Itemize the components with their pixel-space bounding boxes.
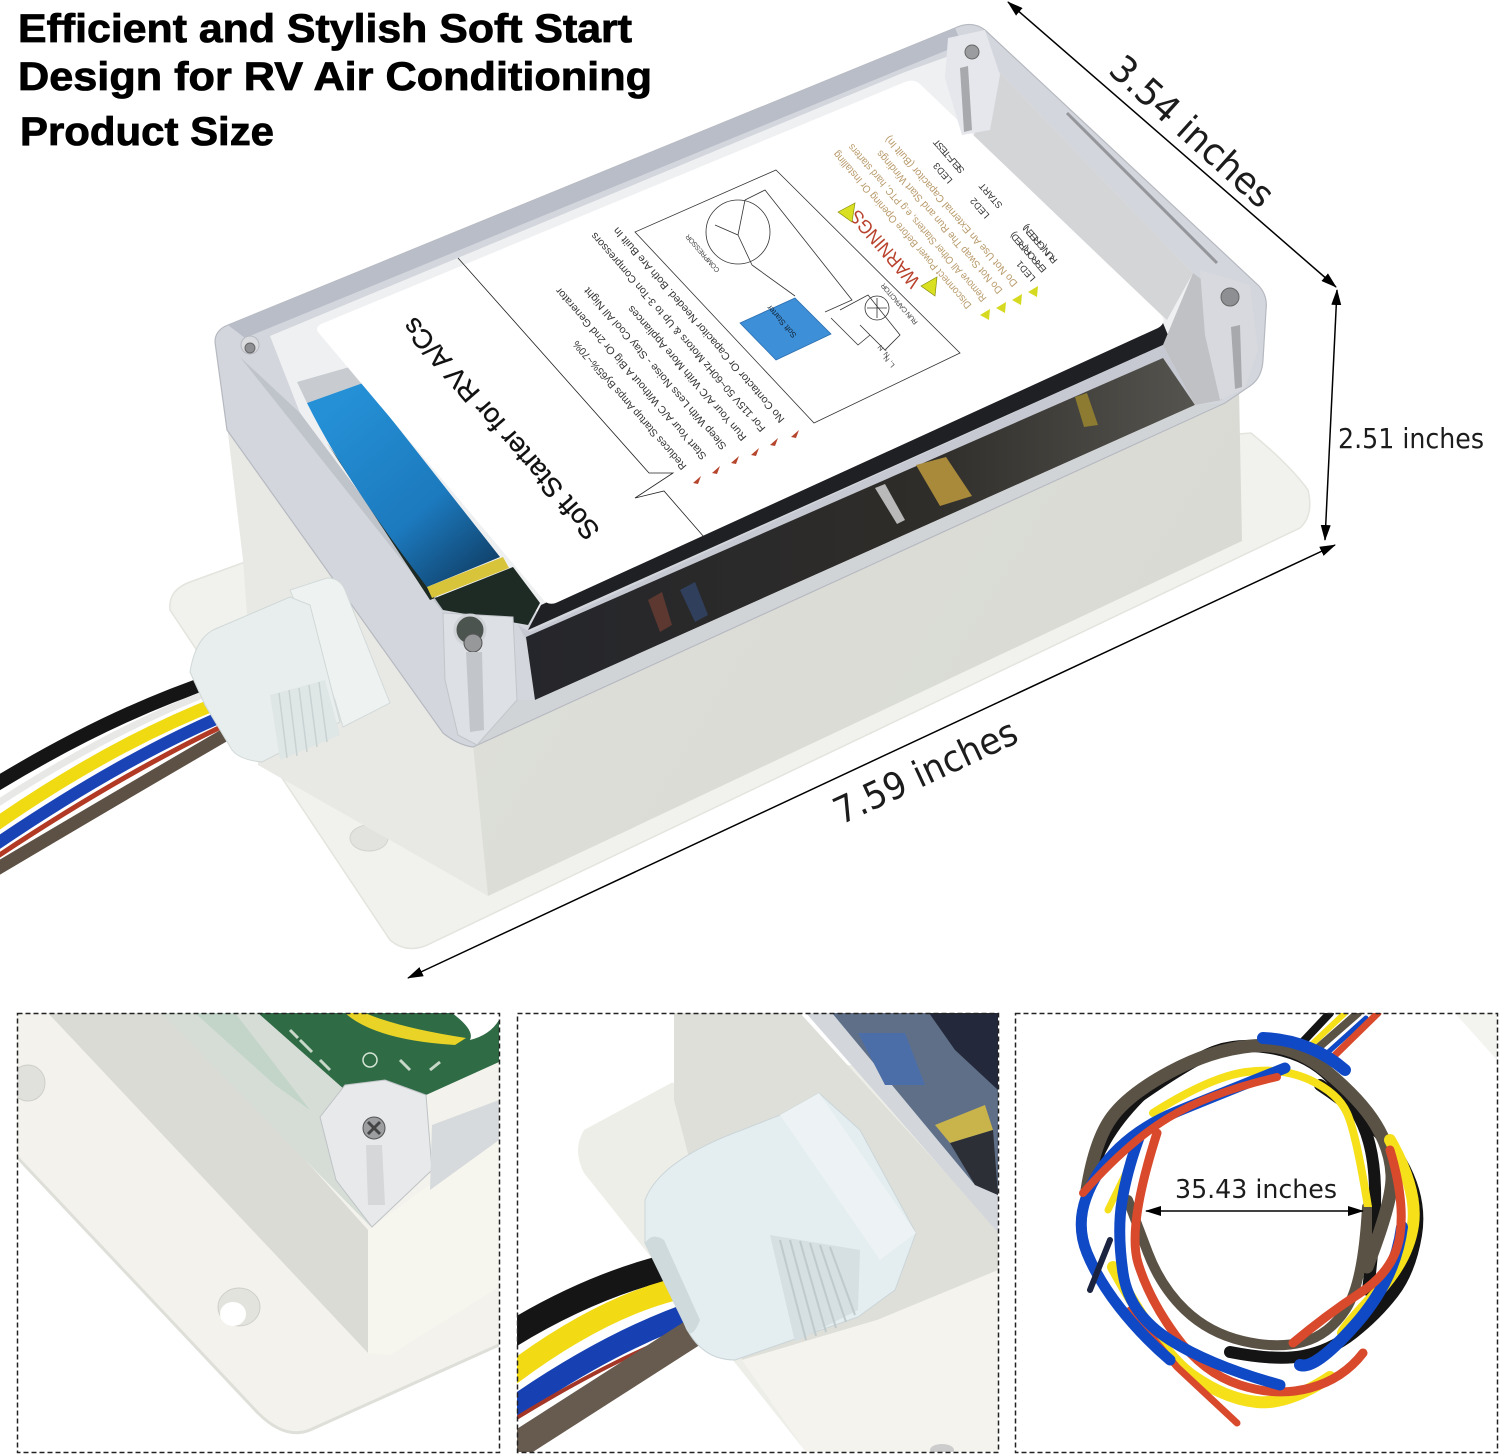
plate closeup <box>578 1065 938 1450</box>
dark window <box>526 358 1195 700</box>
feature list: Start Your A/C Without A Big Or 2nd Generator <box>553 285 709 462</box>
dimension: height 2.51 inches <box>1325 290 1484 540</box>
window details <box>916 457 972 506</box>
body left face <box>227 425 488 896</box>
title <box>18 7 652 154</box>
body side face <box>674 1013 998 1360</box>
warnings block: Do Not Use An External Capacitor (Built In) <box>883 133 1020 289</box>
body side face <box>48 1013 368 1353</box>
title: Efficient and Stylish Soft Start <box>18 7 632 51</box>
dimension: length 7.59 inches <box>408 545 1335 978</box>
panel: lid corner detail <box>11 1013 500 1452</box>
dimension: length 7.59 inches: 7.59 inches <box>827 711 1024 833</box>
LED legend: START <box>977 180 1005 210</box>
feature list: No Contactor Or Capacitor Needed. Both Are Built In <box>611 224 787 425</box>
mounting holes <box>17 1064 46 1102</box>
lid interior <box>832 1013 998 1195</box>
hole <box>930 1444 954 1452</box>
title: Design for RV Air Conditioning <box>18 55 652 99</box>
LED legend: LED1 <box>1014 258 1038 283</box>
speech bubble outline <box>458 258 704 537</box>
feature list: Reduces Startup Amps By65%~70% <box>571 338 689 472</box>
wiring schematic <box>635 170 960 423</box>
feature list: Sleep With Less Noise - Stay Cool All Night <box>582 285 729 452</box>
yellow part <box>935 1105 993 1143</box>
dark part behind capacitor <box>327 443 540 625</box>
soft starter box <box>740 298 831 360</box>
LED legend <box>931 136 1060 283</box>
feature list: For 115V 50~60Hz Motors & Up to 3-Ton Compressors <box>589 230 768 434</box>
right inner interior <box>1163 273 1222 405</box>
clear lid shell <box>215 24 1266 747</box>
LED legend: LED2 <box>968 195 992 220</box>
top rim band <box>228 28 962 338</box>
blue capacitor <box>307 383 500 587</box>
wires closeup <box>510 1262 705 1450</box>
rim strip above window <box>518 345 1195 640</box>
dark band under the card <box>528 323 1170 630</box>
clear lid strip <box>161 1013 371 1227</box>
body lower face <box>878 1270 998 1320</box>
wire end cap <box>1364 1207 1372 1243</box>
wiring schematic: Soft Starter <box>765 303 799 340</box>
feature list: Run Your A/C With More Appliances <box>625 303 749 443</box>
body front face <box>473 388 1242 896</box>
warnings block: Do Not Swap The Run and Start Windings <box>874 148 1005 296</box>
mounting hole <box>350 825 388 851</box>
body front face <box>368 1133 499 1355</box>
dimension: depth 3.54 inches: 3.54 inches <box>1101 47 1283 217</box>
wiring schematic: N, N <box>877 343 892 358</box>
wiring schematic: COMPRESSOR <box>685 232 722 273</box>
mounting plate <box>170 433 1310 948</box>
small step above capacitor <box>297 366 368 403</box>
main product photo: soft starter enclosure <box>0 24 1310 948</box>
mounting plate closeup <box>17 1013 499 1433</box>
wire length dimension: 35.43 inches <box>1175 1175 1337 1205</box>
wiring schematic: L, N <box>883 354 897 368</box>
lid screws and posts <box>241 30 1258 745</box>
circuit board <box>258 1013 499 1095</box>
lower lid strip <box>475 403 1222 745</box>
clear corner post <box>320 1080 432 1227</box>
LED legend: RUN (GREEN) <box>1020 222 1060 265</box>
yellow component <box>427 557 509 598</box>
panel: cable gland detail <box>510 1013 998 1456</box>
left inner wall <box>240 357 443 612</box>
dark corner of interior <box>929 1013 998 1090</box>
dimension: height 2.51 inches: 2.51 inches <box>1338 422 1484 455</box>
wiring schematic: RUN CAPACITOR <box>880 281 920 325</box>
interior bluish part <box>858 1033 925 1085</box>
title: Product Size <box>20 110 274 154</box>
LED legend: SELF-TEST <box>931 136 967 175</box>
screw <box>363 1117 385 1139</box>
warnings block: Disconnect Power Before Opening Or Installing <box>831 148 974 311</box>
lid inner area <box>270 52 1193 612</box>
wire loop <box>1081 1013 1417 1423</box>
label card <box>317 81 1164 604</box>
LED legend: ERROR(RED) <box>1008 229 1049 274</box>
lid strip <box>806 1013 998 1232</box>
feature list <box>553 224 799 484</box>
warnings block: WARNINGS <box>846 205 925 291</box>
right rim reflection <box>1067 113 1217 263</box>
right inner wall <box>973 73 1193 320</box>
cable gland <box>190 578 390 762</box>
plate corner <box>1455 1013 1497 1060</box>
warnings block <box>831 133 1038 320</box>
card heading: Soft Starter for RV A/Cs <box>397 312 606 546</box>
dark lower interior <box>950 1130 998 1195</box>
wire bundle <box>0 680 230 870</box>
panel: wire loop detail <box>1016 1013 1498 1452</box>
warnings block: Remove All Other Starters, e.g PTC, hard starters <box>846 141 989 304</box>
LED legend: LED3 <box>931 160 955 185</box>
dimension: depth 3.54 inches <box>1008 2 1336 287</box>
gland closeup <box>645 1093 916 1360</box>
